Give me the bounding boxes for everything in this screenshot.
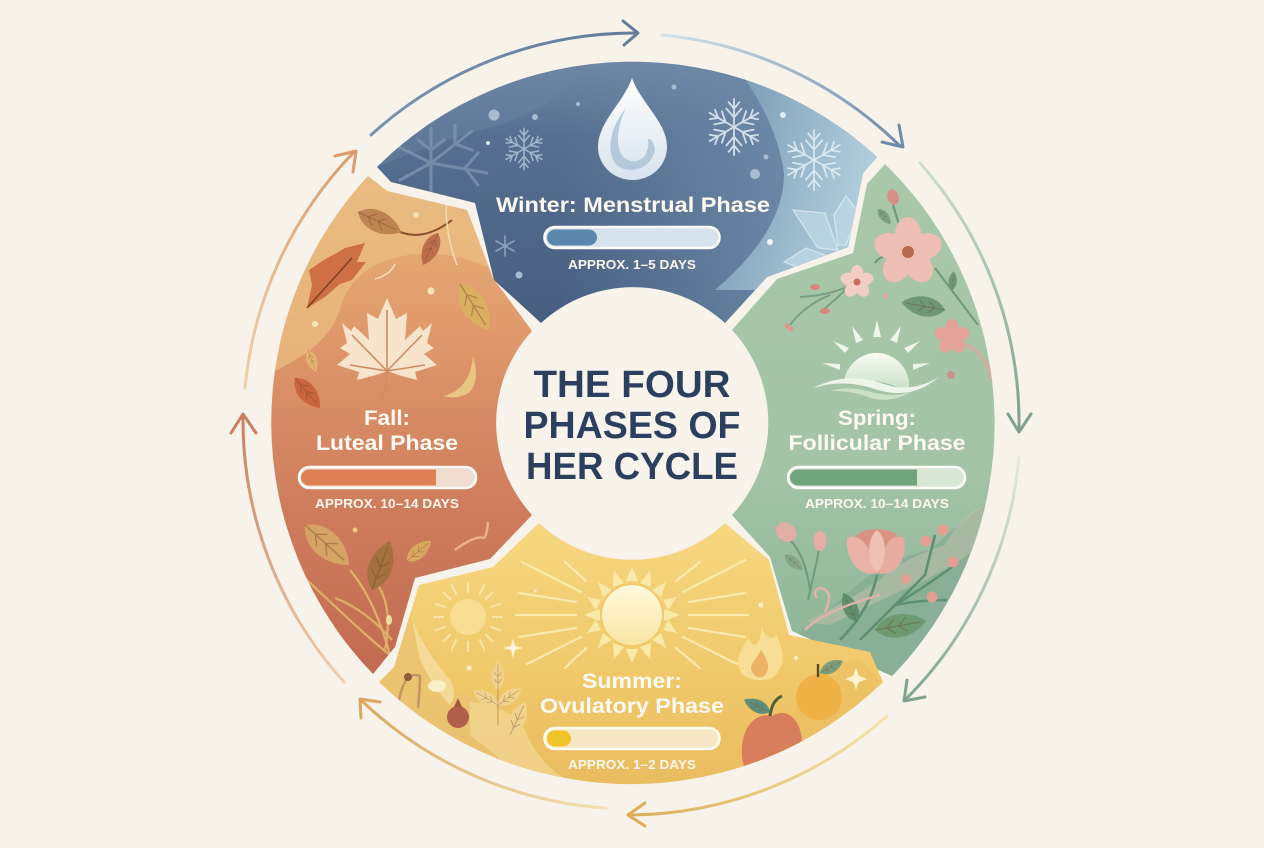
icon: large faded snowflake bbox=[395, 125, 487, 195]
arrow: spring to summer bbox=[904, 457, 1019, 701]
bar: winter 1-5 days bbox=[544, 227, 720, 248]
label: summer duration: APPROX. 1–2 DAYS bbox=[568, 757, 696, 772]
icon: maple leaf bbox=[337, 298, 437, 400]
icon: leaf bbox=[902, 296, 945, 317]
label: fall duration: APPROX. 10–14 DAYS bbox=[315, 496, 459, 511]
icon: sparkle right bbox=[845, 668, 867, 690]
icon: snowflake left bbox=[503, 128, 545, 170]
icon: bud top bbox=[878, 189, 899, 224]
center title: THE FOUR bbox=[534, 364, 730, 406]
icon: pomegranate group bbox=[399, 673, 469, 728]
icon: ice crystals bbox=[784, 196, 858, 268]
icon: small sun bbox=[434, 583, 502, 651]
icon: sunrise bbox=[813, 320, 939, 400]
bar: fall 10-14 days bbox=[299, 467, 476, 488]
icon: yellow leaf right bbox=[458, 284, 490, 330]
bar: spring 10-14 days bbox=[788, 467, 965, 488]
icon: wisp bbox=[375, 180, 457, 279]
icon: water drop bbox=[598, 78, 667, 180]
icon: bud leaf bbox=[948, 272, 957, 290]
panel: summer bbox=[370, 515, 900, 790]
icon: bud pair bbox=[776, 522, 826, 600]
arrow: summer to fall bbox=[360, 699, 606, 808]
heading: summer bbox=[540, 669, 724, 718]
icon: oak leaf bbox=[307, 243, 366, 308]
icon: tiny snowflake bbox=[496, 236, 514, 256]
heading: fall bbox=[316, 406, 458, 455]
bar: summer 1-2 days bbox=[544, 728, 720, 749]
icon: pink flower right bbox=[933, 319, 992, 380]
icon: sparkle left bbox=[503, 638, 523, 658]
label: spring duration: APPROX. 10–14 DAYS bbox=[805, 496, 949, 511]
cycle arrows ring bbox=[231, 21, 1031, 826]
heading: summer: Ovulatory Phase bbox=[540, 694, 724, 718]
heading: fall: Luteal Phase bbox=[316, 431, 458, 455]
heading: spring bbox=[788, 406, 966, 455]
heading: spring: Follicular Phase bbox=[788, 431, 966, 455]
icon: tulip bbox=[840, 524, 958, 640]
center title: HER CYCLE bbox=[526, 446, 738, 488]
arrow: fall to winter top bbox=[371, 21, 638, 135]
icon: pink swirl bbox=[805, 588, 880, 630]
icon: snowflake far right bbox=[784, 130, 844, 190]
arrow: spring upper bbox=[920, 163, 1031, 432]
icon: branch with leaves bbox=[358, 208, 452, 265]
center title: PHASES OF bbox=[524, 405, 740, 447]
dots: summer bbox=[466, 590, 798, 670]
dots: snow bbox=[486, 84, 786, 278]
icon: curled leaf bbox=[443, 356, 476, 397]
arrow: summer lower right bbox=[628, 716, 887, 826]
icon: lower plant bbox=[304, 524, 431, 655]
heading: spring: Spring: bbox=[838, 406, 916, 430]
arrow: fall lower left bbox=[231, 414, 344, 682]
panel: fall bbox=[260, 170, 540, 680]
icon: lower leaves bbox=[842, 592, 926, 638]
icon: pink blossom bbox=[871, 205, 978, 325]
icon: big sun bbox=[516, 560, 748, 668]
arrow: winter top to spring bbox=[662, 35, 903, 147]
icon: orange bbox=[796, 660, 843, 720]
center title bbox=[499, 290, 765, 556]
heading: summer: Summer: bbox=[582, 669, 682, 693]
label: winter duration: APPROX. 1–5 DAYS bbox=[568, 257, 696, 272]
icon: small blossom bbox=[784, 265, 888, 332]
icon: flame bbox=[738, 623, 783, 680]
panel: spring bbox=[725, 160, 1005, 690]
icon: apple bbox=[742, 694, 802, 766]
icon: snowflake right bbox=[706, 99, 762, 155]
icon: plant bbox=[473, 662, 527, 735]
icon: squiggle bbox=[455, 522, 488, 550]
icon: tiny leaves left bbox=[294, 350, 320, 408]
heading: fall: Fall: bbox=[364, 406, 410, 430]
dots: fall bbox=[312, 212, 435, 327]
icon: flame inner bbox=[751, 650, 768, 677]
arrow: fall upper left bbox=[245, 151, 356, 388]
panel: winter bbox=[377, 62, 877, 323]
heading: winter: Winter: Menstrual Phase bbox=[496, 193, 770, 217]
